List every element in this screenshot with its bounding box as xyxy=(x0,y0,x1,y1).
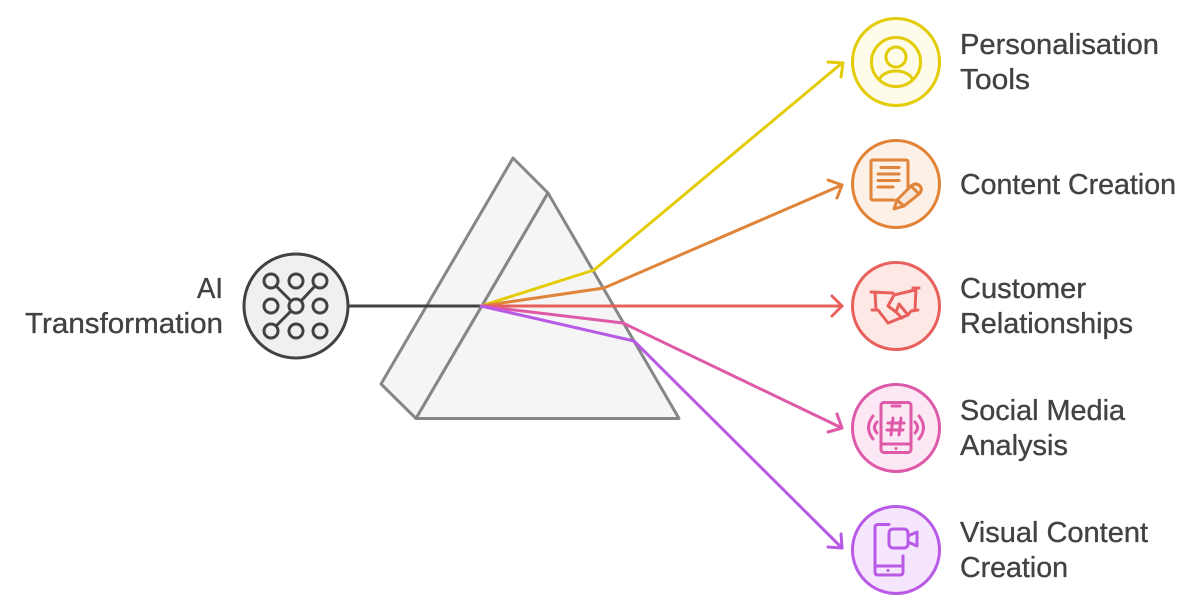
label: personalisation tools: Tools xyxy=(960,64,1030,96)
label: customer relationships: Customer xyxy=(960,273,1086,305)
prism xyxy=(381,158,679,418)
icon: document and pencil xyxy=(852,140,940,228)
label: personalisation tools: Personalisation xyxy=(960,29,1159,61)
icon: person xyxy=(852,18,940,106)
ray: social media xyxy=(481,306,842,432)
label: visual content creation: Creation xyxy=(960,552,1068,584)
label: social media analysis: Social Media xyxy=(960,395,1126,427)
label: customer relationships xyxy=(960,273,1133,340)
ray: visual content xyxy=(481,306,842,548)
icon: handshake xyxy=(852,262,940,350)
label: personalisation tools xyxy=(960,29,1159,96)
source label: AI xyxy=(197,273,223,305)
icon: AI network xyxy=(244,254,348,358)
label: customer relationships: Relationships xyxy=(960,308,1133,340)
ray: customer relationships xyxy=(481,296,842,316)
label: visual content creation xyxy=(960,517,1148,584)
ray: content creation xyxy=(481,180,842,306)
label: social media analysis: Analysis xyxy=(960,430,1068,462)
ray: personalisation xyxy=(481,62,843,306)
source label xyxy=(25,273,223,340)
icon: phone with video camera xyxy=(852,506,940,594)
input ray xyxy=(349,304,481,308)
icon: phone with hashtag xyxy=(852,384,940,472)
source label: Transformation xyxy=(25,308,223,340)
label: visual content creation: Visual Content xyxy=(960,517,1148,549)
label: content creation: Content Creation xyxy=(960,169,1176,201)
label: social media analysis xyxy=(960,395,1126,462)
